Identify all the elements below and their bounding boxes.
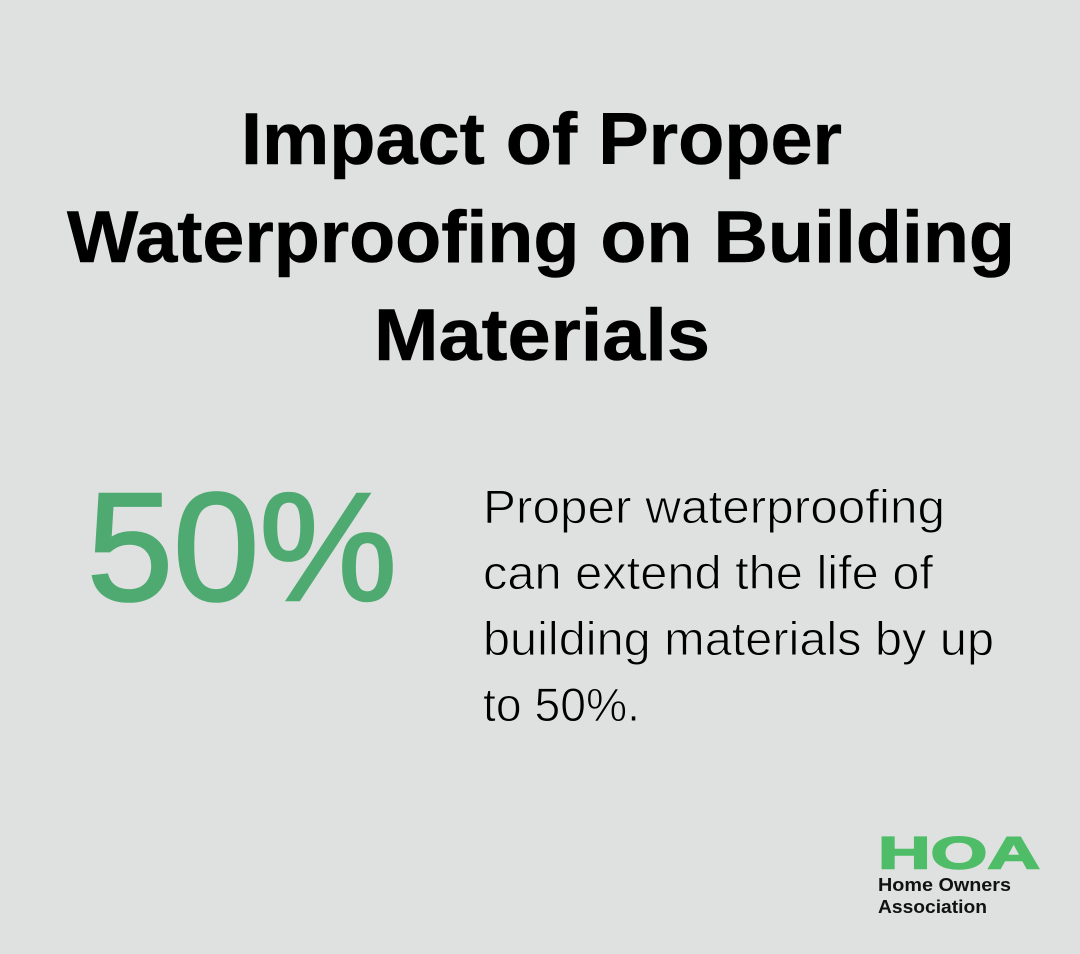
logo: HOA Home Owners Association	[878, 828, 1040, 917]
title	[67, 99, 1015, 376]
logo: HOA Home Owners Association: Home Owners	[878, 875, 1011, 895]
description text: to 50%.	[483, 678, 640, 731]
description text: building materials by up	[483, 612, 994, 665]
logo: HOA Home Owners Association: HOA	[878, 828, 1040, 878]
title: Impact of Proper	[241, 99, 842, 180]
title: Waterproofing on Building	[67, 197, 1015, 278]
description text: can extend the life of	[483, 546, 934, 599]
description text	[483, 480, 994, 731]
title: Materials	[374, 295, 710, 376]
big statistic: 50%: 50%	[87, 461, 397, 633]
description text: Proper waterproofing	[483, 480, 945, 533]
logo: HOA Home Owners Association: Association	[878, 897, 987, 917]
